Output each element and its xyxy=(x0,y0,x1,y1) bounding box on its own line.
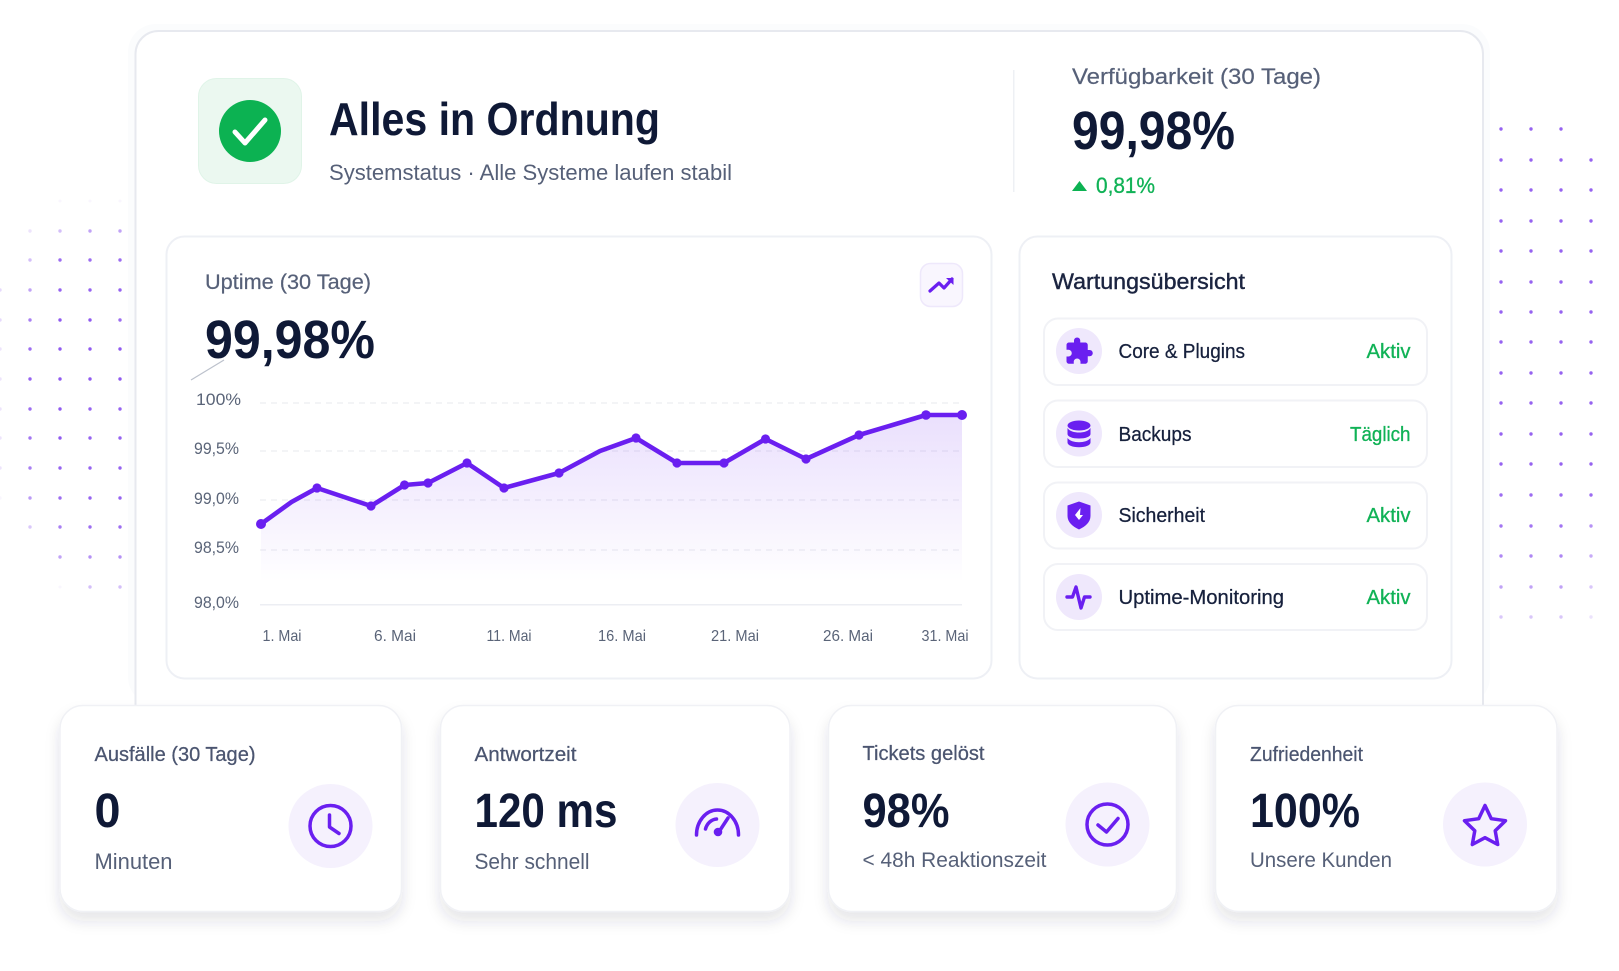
stat card: tickets xyxy=(828,706,1176,912)
panel: uptime chart xyxy=(166,236,992,678)
availability summary xyxy=(1013,64,1321,198)
icon: database xyxy=(1068,420,1090,447)
icon: check circle xyxy=(1066,782,1150,866)
row label: Uptime-Monitoring xyxy=(1118,587,1284,609)
icon: green check badge xyxy=(198,78,302,184)
stat value: 100% xyxy=(1250,785,1360,838)
row: core and plugins xyxy=(1044,318,1427,385)
row: uptime monitoring xyxy=(1044,564,1427,630)
x axis labels xyxy=(262,628,968,645)
stat card: outages xyxy=(60,706,402,912)
x axis labels: 1. Mai xyxy=(262,628,302,645)
x axis labels: 11. Mai xyxy=(486,628,532,645)
availability value: 99,98% xyxy=(1072,101,1235,161)
row status: Aktiv xyxy=(1366,341,1410,363)
stat label: Ausfälle (30 Tage) xyxy=(94,744,256,766)
stat label: Tickets gelöst xyxy=(862,743,985,765)
y axis labels: 98,5% xyxy=(194,538,239,557)
icon: clock xyxy=(288,784,372,868)
stat note: Unsere Kunden xyxy=(1250,849,1392,872)
area fill xyxy=(261,415,962,582)
row: security xyxy=(1044,482,1427,548)
icon: puzzle xyxy=(1066,337,1093,364)
stat card: satisfaction xyxy=(1216,706,1557,912)
availability label: Verfügbarkeit (30 Tage) xyxy=(1072,64,1321,89)
stat note: Minuten xyxy=(94,849,172,874)
x axis labels: 16. Mai xyxy=(598,628,646,645)
status header xyxy=(198,78,732,185)
row status: Täglich xyxy=(1350,424,1410,446)
stat label: Zufriedenheit xyxy=(1250,744,1363,766)
y axis labels: 99,5% xyxy=(194,439,239,458)
y axis labels xyxy=(194,390,241,612)
x axis labels: 6. Mai xyxy=(374,628,416,645)
panel: maintenance overview xyxy=(1020,236,1452,678)
y axis labels: 100% xyxy=(196,390,241,409)
icon: up triangle xyxy=(1072,181,1087,191)
subtitle: Systemstatus · Alle Systeme laufen stabil xyxy=(329,160,732,185)
y axis labels: 99,0% xyxy=(194,489,239,508)
x axis labels: 31. Mai xyxy=(922,628,968,645)
stat value: 120 ms xyxy=(474,785,618,838)
line series xyxy=(256,410,967,529)
stat label: Antwortzeit xyxy=(474,744,577,766)
stat note: Sehr schnell xyxy=(474,849,590,874)
stray stroke xyxy=(191,360,224,380)
icon: gauge xyxy=(676,783,760,867)
icon: trend button xyxy=(920,264,962,306)
row status: Aktiv xyxy=(1366,587,1410,609)
row label: Backups xyxy=(1118,424,1192,446)
uptime label: Uptime (30 Tage) xyxy=(205,271,371,294)
icon: pulse xyxy=(1067,587,1090,608)
title: Alles in Ordnung xyxy=(329,93,660,145)
stat card: response time xyxy=(440,706,790,912)
stat note: < 48h Reaktionszeit xyxy=(862,849,1047,872)
stat value: 0 xyxy=(94,785,120,838)
icon: star xyxy=(1443,782,1527,866)
row label: Sicherheit xyxy=(1118,505,1205,527)
maintenance heading: Wartungsübersicht xyxy=(1052,269,1245,294)
panel: main card xyxy=(128,24,1490,706)
icon: shield xyxy=(1068,502,1090,530)
stat value: 98% xyxy=(862,785,950,838)
x axis labels: 21. Mai xyxy=(711,628,759,645)
grid lines xyxy=(260,403,962,550)
row label: Core & Plugins xyxy=(1118,341,1245,363)
uptime value: 99,98% xyxy=(205,310,375,370)
y axis labels: 98,0% xyxy=(194,593,239,612)
availability change: 0,81% xyxy=(1096,173,1155,198)
decorative dots left xyxy=(0,200,122,589)
row: backups xyxy=(1044,400,1427,467)
row status: Aktiv xyxy=(1366,505,1410,527)
decorative dots right xyxy=(1499,127,1593,619)
x axis labels: 26. Mai xyxy=(823,628,873,645)
